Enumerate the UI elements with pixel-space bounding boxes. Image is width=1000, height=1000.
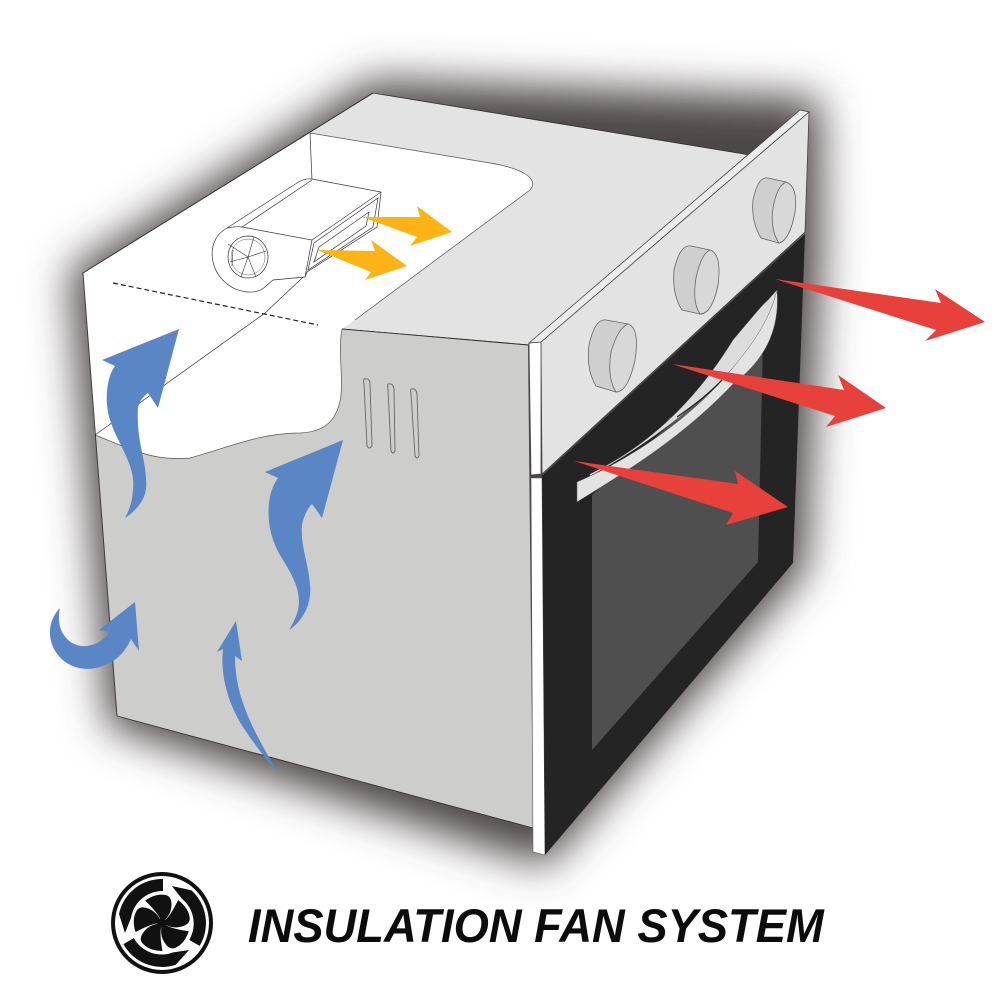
yellow exhaust arrows: [317, 206, 452, 280]
outer arc segments: [119, 879, 222, 982]
fan blades: [130, 895, 192, 956]
control panel: [541, 112, 809, 474]
interior edges: [95, 133, 312, 435]
front frame edge: [529, 342, 541, 475]
door handle: [577, 290, 777, 502]
white door edge: [531, 478, 545, 855]
vent slots: [364, 379, 419, 458]
blue air arrows: [50, 329, 343, 773]
side face outline: [83, 93, 533, 828]
shadow glow behind oven: [70, 80, 822, 866]
oven window: [592, 340, 763, 750]
white cutaway revealing the interior: [83, 133, 533, 459]
oven door: [542, 234, 805, 855]
red heat arrows: [574, 279, 985, 525]
oven top surface: [83, 93, 750, 345]
dashed cavity line: [113, 283, 318, 325]
insulation fan unit: [212, 179, 381, 292]
title: INSULATION FAN SYSTEM: [248, 900, 824, 953]
control knobs: [588, 178, 796, 392]
cutaway outline: [95, 133, 533, 459]
oven side face: [83, 273, 533, 828]
